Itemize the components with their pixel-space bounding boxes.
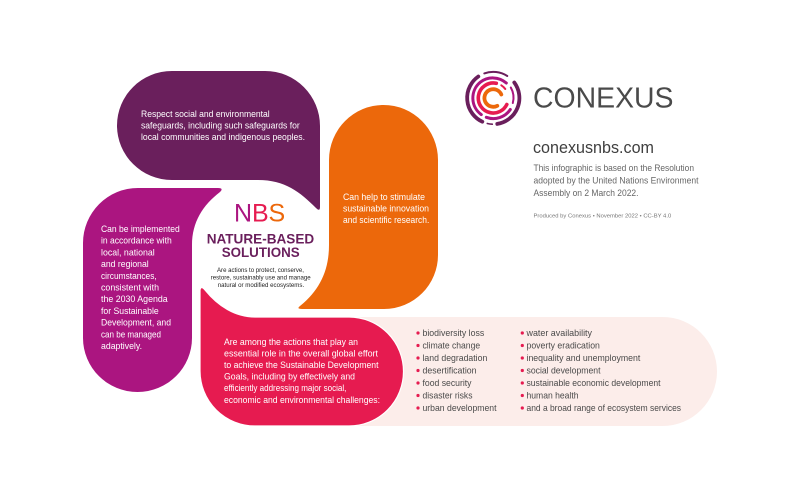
panel: implementation (83, 188, 222, 392)
heading: NBS: S (268, 200, 285, 228)
text: source note: This infographic is based on the Resolution (534, 163, 694, 173)
list: challenges column one: urban development (422, 402, 497, 413)
panel: implementation: and regional (101, 258, 149, 269)
panel: sustainable development goals (200, 288, 403, 426)
list: challenges column one: land degradation (422, 352, 487, 363)
website link: conexusnbs.com (533, 139, 654, 157)
panel: innovation: and scientific research. (343, 214, 429, 225)
panel: sustainable development goals: to achieve the Sustainable Development (224, 359, 379, 370)
list: challenges column one (416, 327, 497, 413)
list: challenges column two: poverty eradication (526, 340, 600, 350)
panel: innovation: sustainable innovation (343, 203, 429, 214)
list: challenges column two: water availability (526, 327, 592, 338)
panel: sustainable development goals: essential role in the overall global effort (224, 347, 378, 358)
text: definition (211, 267, 311, 289)
panel: sustainable development goals: economic and environmental challenges: (224, 394, 380, 405)
heading: NBS: N (234, 200, 252, 228)
list: challenges column two: social development (526, 364, 601, 376)
list: challenges column two: inequality and unemployment (526, 352, 641, 363)
text: source note: adopted by the United Nations Environment (534, 176, 699, 186)
panel: safeguards: local communities and indigenous peoples. (141, 131, 305, 142)
text: credit: Produced by Conexus • November 2022 • CC-BY 4.0 (534, 214, 671, 220)
text: definition: restore, sustainably use and manage (211, 274, 311, 281)
panel: safeguards: safeguards, including such safeguards for (141, 120, 300, 131)
icon: Conexus logo (467, 72, 519, 124)
logo wordmark: CONEXUS: CONEXUS (533, 83, 674, 115)
list: challenges column two (521, 327, 681, 413)
panel: sustainable development goals: Goals, including by effectively and (224, 371, 355, 382)
panel: sustainable development goals: efficiently addressing major social, (224, 382, 346, 393)
panel: innovation: Can help to stimulate (343, 191, 425, 202)
panel: implementation: the 2030 Agenda (101, 293, 168, 304)
text: source note (534, 163, 699, 198)
list: challenges column two: human health (526, 390, 578, 400)
text: definition: Are actions to protect, conserve, (217, 267, 304, 274)
heading: nature-based solutions: NATURE-BASED (207, 230, 314, 246)
panel: innovation (298, 105, 438, 309)
panel: implementation: for Sustainable (101, 305, 159, 316)
list: challenges column one: disaster risks (422, 390, 473, 400)
list: challenges column two: and a broad range of ecosystem services (526, 402, 681, 413)
panel: challenges list background (300, 317, 717, 426)
panel: implementation: can be managed (101, 328, 161, 339)
panel: implementation: consistent with (101, 282, 159, 292)
panel: safeguards: Respect social and environmental (141, 108, 270, 119)
panel: implementation: circumstances, (101, 270, 157, 281)
heading: nature-based solutions: SOLUTIONS (222, 244, 300, 260)
text: source note: Assembly on 2 March 2022. (534, 188, 638, 198)
heading: NBS (234, 200, 285, 228)
list: challenges column one: food security (422, 377, 472, 388)
panel: implementation: Development, and (101, 317, 171, 328)
list: challenges column one: climate change (422, 340, 480, 350)
panel: implementation: adaptively. (101, 340, 142, 351)
list: challenges column one: desertification (422, 364, 476, 376)
panel: sustainable development goals: Are among the actions that play an (224, 336, 358, 347)
panel: implementation: Can be implemented (101, 223, 180, 234)
heading: NBS: B (252, 200, 269, 228)
list: challenges column two: sustainable economic development (526, 377, 661, 388)
list: challenges column one: biodiversity loss (422, 327, 484, 338)
panel: implementation: local, national (101, 246, 155, 257)
heading: nature-based solutions (207, 230, 314, 260)
text: definition: natural or modified ecosystems. (218, 282, 304, 289)
panel: safeguards (117, 71, 320, 210)
panel: implementation: in accordance with (101, 235, 172, 246)
